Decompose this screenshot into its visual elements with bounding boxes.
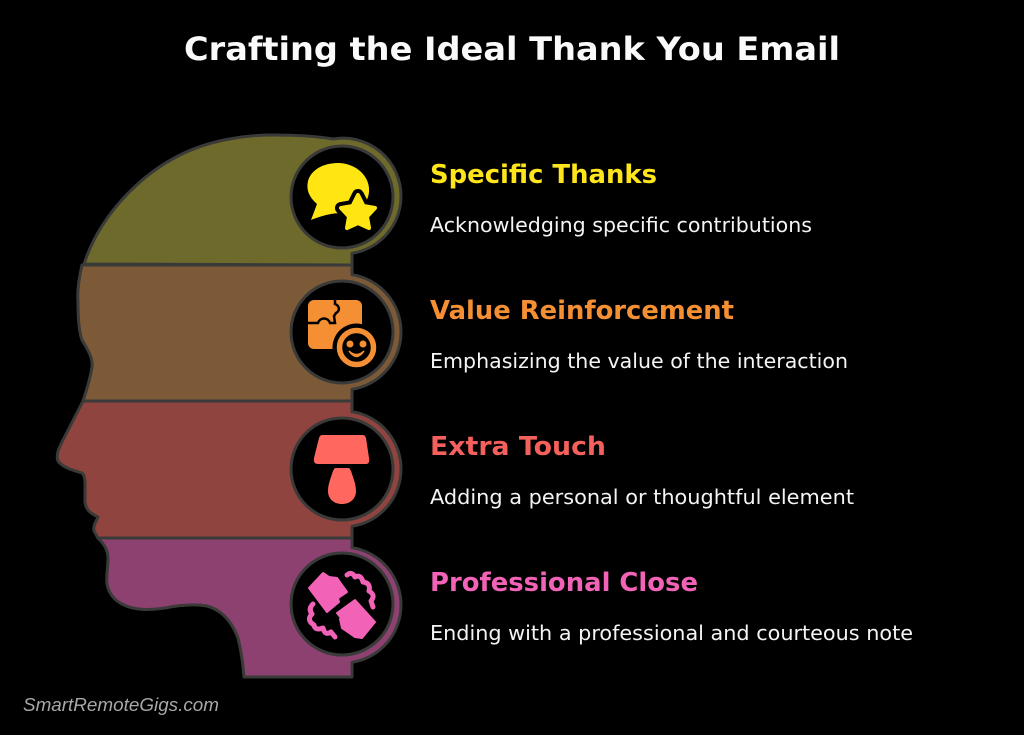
panel: head segment 1 [84,135,401,265]
panel: head segment 3 [57,401,401,538]
title: Crafting the Ideal Thank You Email [184,30,840,68]
description: Adding a personal or thoughtful element [430,485,854,509]
panel: head segment 2 [78,265,401,401]
text: Professional Close [430,568,913,645]
text: Extra Touch [430,432,854,509]
heading: Extra Touch [430,432,606,462]
description: Ending with a professional and courteous note [430,621,913,645]
description: Emphasizing the value of the interaction [430,349,848,373]
text: Value Reinforcement [430,296,848,373]
heading: Professional Close [430,568,698,598]
icon: lamp [291,418,393,520]
icon: puzzle with smiley [291,281,393,383]
heading: Value Reinforcement [430,296,734,326]
panel: head segment 4 [98,538,401,677]
text: Specific Thanks [430,160,812,237]
heading: Specific Thanks [430,160,657,190]
head diagram [57,135,401,677]
icon: handshake [291,553,393,655]
watermark: SmartRemoteGigs.com [23,695,219,715]
description: Acknowledging specific contributions [430,213,812,237]
icon: speech bubble with star [291,146,393,248]
